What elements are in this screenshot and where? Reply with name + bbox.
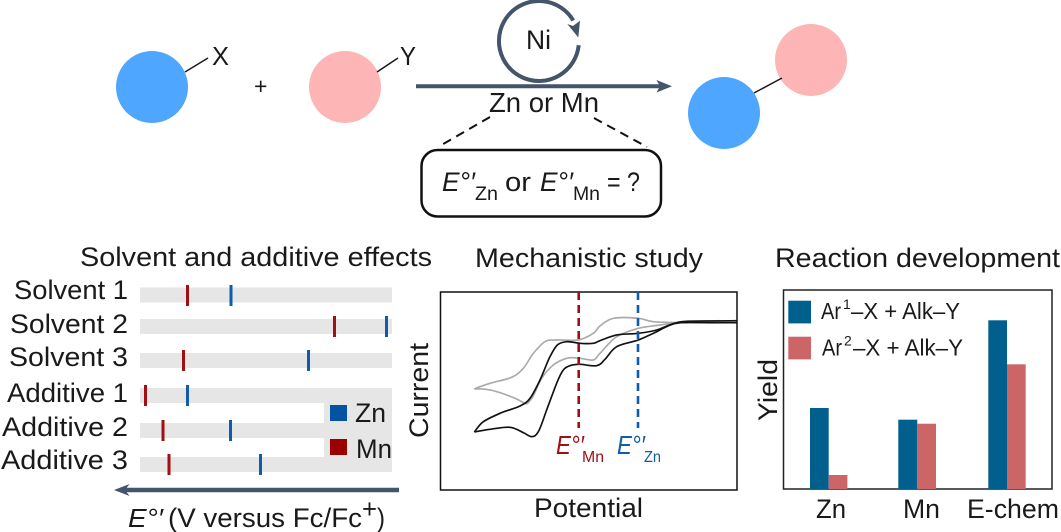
Zn potential label: Zn [644, 449, 661, 466]
legend: –X + Alk–Y [853, 335, 963, 361]
reductant label: Zn or Mn [489, 87, 599, 118]
legend [788, 296, 963, 361]
Mn potential ticks [144, 285, 336, 475]
axis label [128, 494, 385, 532]
icon: Ni catalytic cycle [495, 0, 583, 85]
axis label: + [362, 494, 377, 524]
bar chart [784, 290, 1052, 489]
Zn potential line [637, 292, 639, 428]
reaction scheme [116, 0, 847, 216]
callout: potential question: E°′ [540, 167, 574, 197]
callout: potential question: = ? [607, 167, 640, 197]
row labels: Additive 3 [1, 445, 128, 475]
legend: Ar [821, 298, 841, 324]
Zn potential ticks [186, 285, 388, 475]
y axis label: Yield [753, 359, 783, 421]
reactant: blue sphere with X [116, 41, 229, 123]
row labels: Solvent 2 [10, 309, 128, 339]
voltammogram traces [474, 318, 737, 437]
Mn potential line [577, 292, 580, 428]
cyclic voltammogram plot [440, 292, 737, 490]
legend: Ar [822, 335, 842, 361]
callout: potential question: or [505, 167, 531, 197]
Mn bars [898, 420, 936, 489]
reactant: pink sphere with Y [309, 41, 416, 123]
row labels: Solvent 1 [14, 275, 128, 305]
legend: 2 [844, 333, 852, 349]
row labels: Solvent 3 [9, 342, 128, 372]
Mn potential label: Mn [582, 449, 604, 466]
panel: mechanistic study [404, 243, 737, 523]
product: coupled spheres [688, 24, 847, 149]
legend: –X + Alk–Y [851, 298, 960, 324]
row labels: Additive 2 [2, 412, 128, 442]
Zn bars [810, 408, 847, 489]
legend: 1 [843, 296, 851, 312]
callout: potential question [422, 150, 661, 216]
heading: Mechanistic study [475, 243, 704, 273]
legend: Zn [355, 398, 386, 428]
callout: potential question: Mn [573, 184, 600, 205]
x axis labels [816, 494, 1059, 524]
potential tracks [140, 288, 392, 472]
x axis labels: E-chem [967, 494, 1059, 524]
reactant: pink sphere with Y: Y [400, 41, 416, 71]
x axis labels: Mn [903, 494, 940, 524]
row labels [1, 275, 128, 475]
y axis label: Current [404, 342, 434, 438]
callout: potential question: E°′ [442, 167, 476, 197]
reactant: blue sphere with X: X [212, 41, 229, 71]
legend [330, 398, 392, 464]
Mn potential label [556, 430, 604, 466]
x axis labels: Zn [816, 494, 846, 524]
arrow: reaction arrow [416, 80, 672, 92]
legend: Mn [356, 434, 392, 464]
callout: potential question: Zn [475, 184, 498, 205]
panel: reaction development [753, 243, 1061, 524]
row labels: Additive 1 [7, 378, 128, 408]
Zn potential label: E°′ [617, 430, 646, 460]
arrow: potential axis [114, 484, 399, 496]
x axis label: Potential [534, 493, 643, 523]
Mn potential label: E°′ [556, 430, 585, 460]
panel: solvent and additive effects [1, 242, 432, 532]
heading: Solvent and additive effects [80, 242, 432, 272]
callout connector lines [438, 117, 647, 147]
icon: Ni catalytic cycle: Ni [526, 25, 551, 55]
Zn potential label [617, 430, 661, 466]
heading: Reaction development [775, 243, 1061, 273]
plus sign: + [254, 73, 267, 99]
E-chem bars [988, 320, 1026, 489]
